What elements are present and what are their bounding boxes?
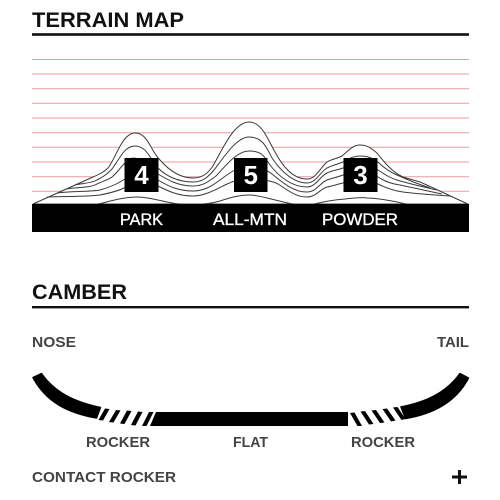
nose rocker hatch — [98, 408, 154, 426]
label: all-mtn: ALL-MTN — [213, 210, 287, 229]
heading: terrain map: TERRAIN MAP — [32, 8, 184, 32]
rating: powder 3: 3 — [353, 160, 368, 190]
label: nose: NOSE — [32, 334, 76, 351]
nose curve — [33, 374, 100, 418]
label: rocker left: ROCKER — [86, 434, 150, 451]
label: flat: FLAT — [233, 434, 268, 451]
rating: all-mtn 5 — [234, 158, 268, 192]
flat section — [150, 412, 348, 426]
tail rocker hatch — [350, 407, 406, 426]
heading: camber: CAMBER — [32, 280, 127, 304]
base bar — [32, 204, 469, 232]
label: park: PARK — [120, 210, 164, 229]
tail curve — [401, 374, 468, 418]
rating: park 4 — [124, 158, 158, 192]
label: rocker right: ROCKER — [351, 434, 415, 451]
terrain contours — [33, 122, 468, 205]
icon: plus — [452, 470, 467, 484]
label: powder: POWDER — [322, 210, 398, 229]
rating: park 4: 4 — [134, 160, 149, 190]
scale grid lines — [32, 60, 469, 191]
rating: all-mtn 5: 5 — [243, 160, 258, 190]
rating: powder 3 — [344, 158, 378, 192]
label: tail: TAIL — [437, 334, 469, 351]
label: contact rocker: CONTACT ROCKER — [32, 469, 176, 486]
camber profile — [33, 374, 468, 426]
terrain chart — [32, 60, 469, 232]
